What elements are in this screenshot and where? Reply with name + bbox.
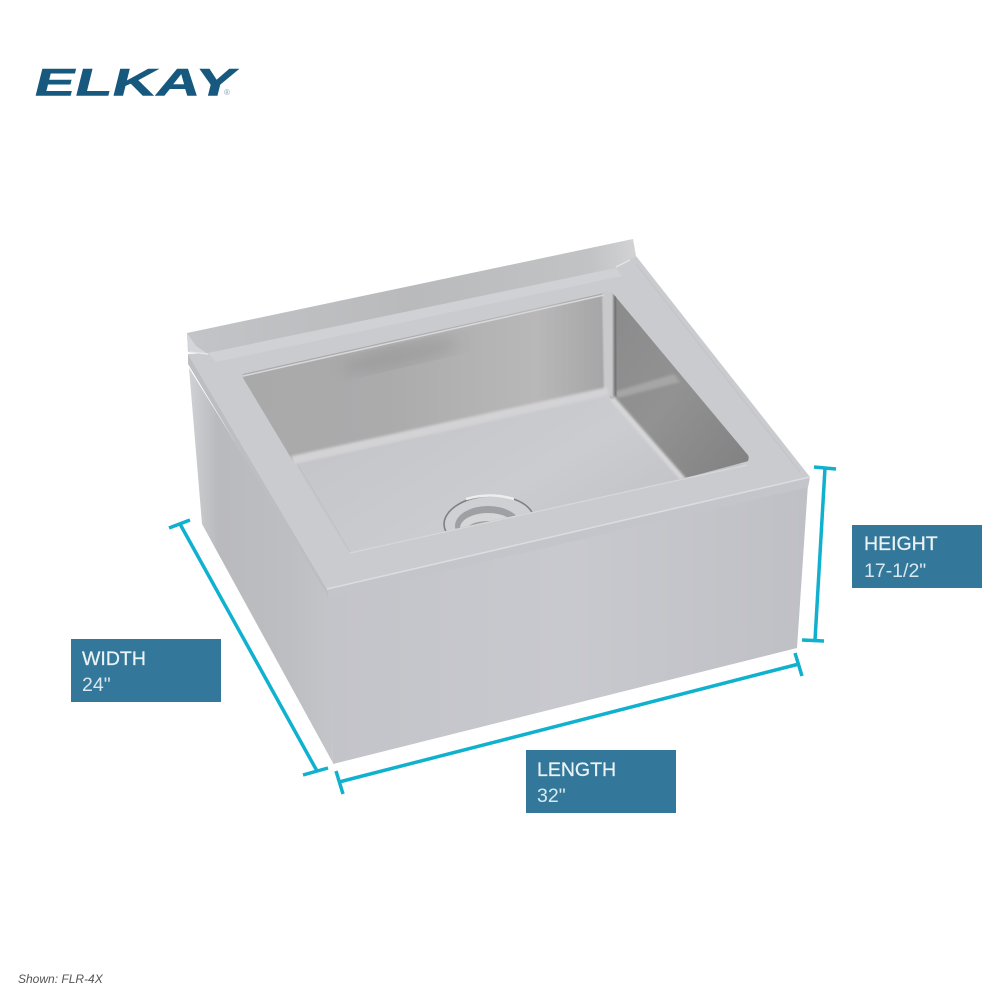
label: length: LENGTH xyxy=(537,759,616,781)
product: stainless steel mop sink xyxy=(187,239,810,764)
logo: ELKAY xyxy=(30,62,241,104)
label: width: 24" xyxy=(82,674,111,696)
basin floor xyxy=(719,464,741,470)
basin right wall xyxy=(610,290,752,479)
dimension line: height xyxy=(802,467,836,641)
label: width xyxy=(71,639,221,702)
basin back wall xyxy=(240,290,610,460)
label: height: 17-1/2" xyxy=(864,560,926,582)
backsplash xyxy=(187,239,636,354)
label: width: WIDTH xyxy=(82,648,146,670)
sink front panel xyxy=(329,484,808,764)
label: length: 32" xyxy=(537,785,566,807)
basin weld seam highlight xyxy=(292,391,608,460)
label: height: HEIGHT xyxy=(864,533,938,555)
dimension line: length xyxy=(336,653,802,794)
logo: ELKAY: ® xyxy=(224,88,230,97)
drain strainer xyxy=(443,494,532,531)
caption: model shown: Shown: FLR-4X xyxy=(18,972,104,986)
label: height xyxy=(852,525,982,588)
sink left side panel xyxy=(189,368,333,763)
logo: ELKAY: ELKAY xyxy=(30,62,241,104)
rim top surface xyxy=(188,256,810,598)
label: length xyxy=(526,750,676,813)
basin interior xyxy=(242,292,749,531)
dimension line: width xyxy=(169,520,328,775)
